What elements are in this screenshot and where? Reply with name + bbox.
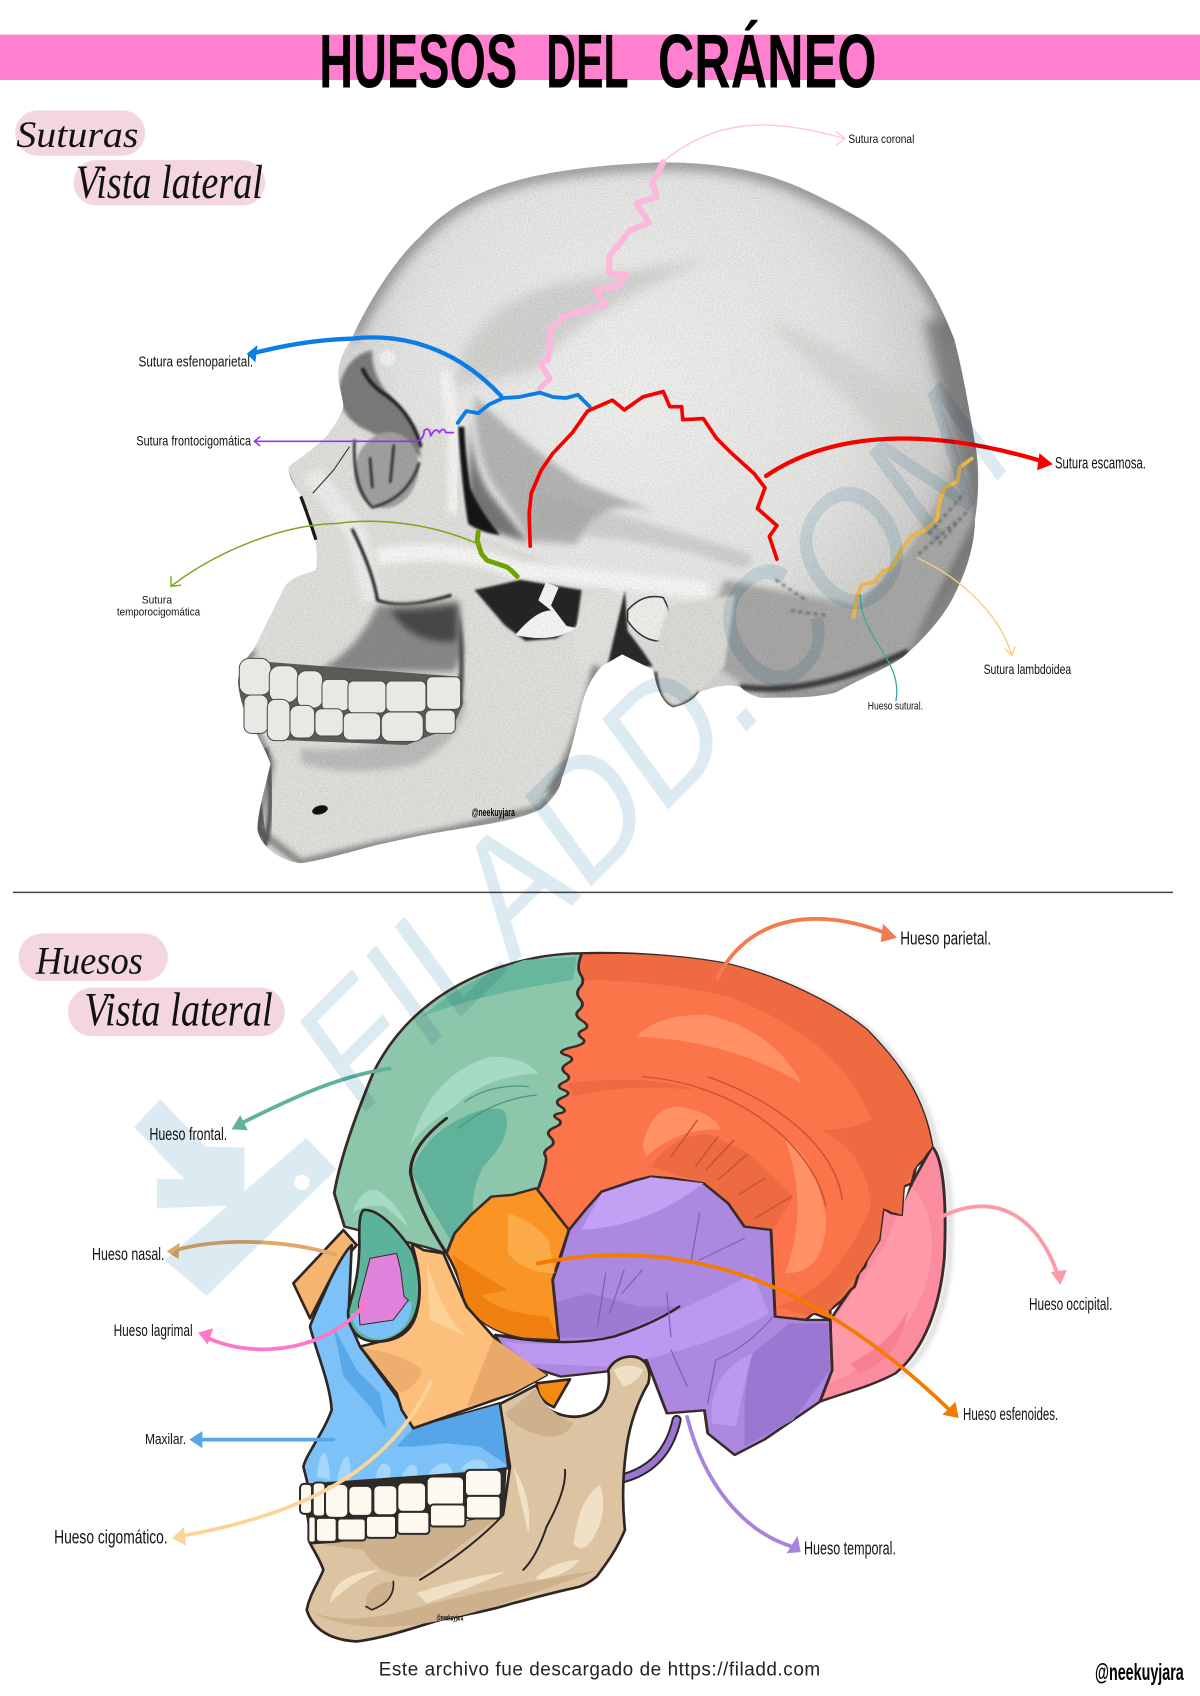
suture: frontozygomatic purple with arrow [254,429,453,446]
teeth and jaw detail [239,658,515,819]
title: CRÁNEO [658,20,876,105]
title: HUESOS [319,20,517,105]
rear dark band [760,320,985,697]
rim shading [353,162,954,340]
watermark icon [134,1099,337,1296]
watermark: FILADD.COM [271,345,1036,1149]
label: hueso sutural: Hueso sutural. [868,701,923,713]
title: DEL [546,20,629,105]
zygomatic recess [474,580,582,641]
label: sutura esfenoparietal: Sutura esfenoparietal. [139,354,253,371]
nose fracture line [301,496,316,540]
under-cheek shadow [316,600,463,672]
lower teeth [308,1496,501,1543]
watermark [134,345,1036,1296]
coloured skull illustration [293,953,950,1641]
label: hueso occipital: Hueso occipital. [1029,1294,1112,1314]
temporal hook fill [623,1420,677,1478]
occipital rough patch [699,462,975,692]
bone: frontal [334,953,587,1253]
bone: nasal [293,1230,357,1318]
label: sutura temporocigomática: temporocigomática [117,606,201,618]
suture: sphenoparietal blue with arrow [247,337,590,423]
temporal hook [623,1420,677,1478]
ear opening [557,1375,663,1467]
soft shadow [729,966,950,1376]
forehead subtle shade [455,262,688,386]
label: sutura coronal: Sutura coronal [848,132,914,146]
bone: parietal [516,953,932,1320]
arrow: lacrimal [198,1302,366,1349]
signature on jaw: @neekuyjara [472,807,515,819]
label: hueso temporal: Hueso temporal. [804,1537,896,1558]
mastoid [653,595,735,707]
suture: temporozygomatic green with arrow [171,521,517,586]
arrow: parietal [717,919,897,978]
label: sutura frontocigomática: Sutura frontocigomática [136,433,251,449]
face bones [293,1210,677,1641]
skull detail layer [265,258,985,845]
label: hueso nasal: Hueso nasal. [92,1244,164,1264]
footer text: Este archivo fue descargado de https://filadd.com [379,1659,820,1680]
face tone [246,416,587,863]
suture: coronal pink with arrow [540,125,845,388]
heading: suturas vista lateral: Suturas [16,114,139,155]
arrow: maxilar [189,1431,333,1448]
arrow: sphenoid [538,1255,959,1418]
arrow: frontal [232,1069,390,1130]
nasal suture line [313,447,350,493]
signature on mandible: @neekuyjara [437,1613,464,1622]
suture: squamous red with arrow [529,392,1052,559]
label: hueso esfenoides: Hueso esfenoides. [963,1404,1058,1424]
cranium bones [334,953,950,1455]
arrow: occipital [941,1206,1067,1285]
label: maxilar: Maxilar. [145,1431,186,1448]
bone: small orange piece [537,1379,570,1407]
label: hueso lagrimal: Hueso lagrimal [114,1322,193,1340]
nasal side highlight [311,473,372,600]
heading: suturas vista lateral: Vista lateral [76,157,263,209]
tympanic bone [628,597,670,641]
heading: huesos vista lateral: Huesos [35,939,143,982]
mental foramen [311,804,329,816]
upper teeth [300,1470,502,1518]
label: sutura temporocigomática: Sutura [142,595,173,607]
label: hueso cigomático: Hueso cigomático. [54,1526,168,1548]
bone: sphenoid [446,1188,569,1340]
divider [13,891,1173,893]
arrow: hueso sutural [860,595,897,701]
label: hueso parietal: Hueso parietal. [900,927,991,948]
bone: temporal [495,1177,832,1455]
bone: occipital [820,1147,945,1402]
bone: mandible [307,1357,649,1641]
mandible condyle [576,588,613,628]
mandible shading [301,697,465,771]
arrow: zygomatic [172,1382,431,1546]
bone: orbit [348,1210,419,1342]
suture: lambdoid tan with arrow [854,459,1015,655]
heading: suturas vista lateral [15,110,265,209]
bone: maxilla [303,1245,508,1488]
label: sutura escamosa: Sutura escamosa. [1055,454,1146,472]
teeth backing [301,1469,507,1543]
label: sutura lambdoidea: Sutura lambdoidea [984,661,1071,677]
title band [0,35,1200,80]
arrow: nasal [167,1242,335,1259]
arch highlight [378,553,709,590]
heading: huesos vista lateral [18,933,285,1036]
realistic skull illustration [233,157,990,876]
orbit [354,432,420,510]
bone: zygomatic [360,1243,547,1428]
orbital line [352,529,452,604]
heading: huesos vista lateral: Vista lateral [84,984,273,1036]
arrow: temporal [687,1417,801,1553]
brow shadow [339,350,421,457]
label: hueso frontal: Hueso frontal. [149,1124,227,1144]
temporal fossa [474,396,658,544]
